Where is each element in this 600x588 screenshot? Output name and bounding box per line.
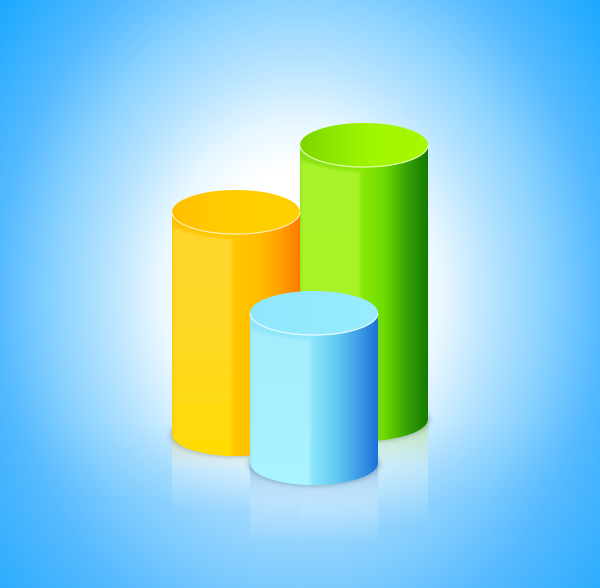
background: floor tint <box>0 420 600 588</box>
cylinder: green (tallest) <box>298 123 430 445</box>
cylinder: yellow (medium) <box>170 190 302 460</box>
cylinder: light blue (shortest) <box>248 291 380 490</box>
floor reflections <box>172 419 428 542</box>
